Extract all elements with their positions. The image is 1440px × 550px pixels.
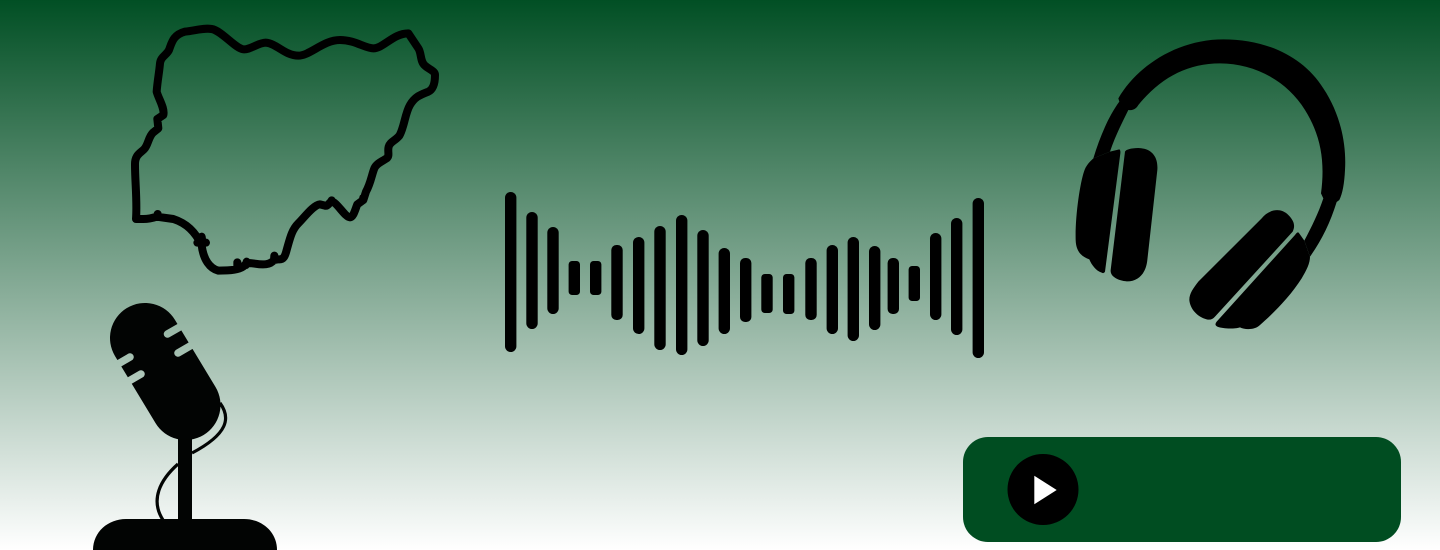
player background [963, 437, 1401, 542]
icon: studio microphone [93, 320, 277, 550]
icon: outline map of Nigeria [135, 29, 435, 271]
microphone grille slots [106, 320, 203, 388]
headband [1093, 39, 1345, 257]
right outer ear cup [1215, 232, 1310, 329]
play triangle [1034, 476, 1057, 504]
left outer ear cup [1076, 149, 1120, 273]
right ear pad [1189, 210, 1294, 320]
microphone cord [157, 403, 226, 520]
sound wave bars [505, 192, 984, 358]
play button circle [1008, 454, 1078, 525]
icon: headphones [1076, 39, 1345, 329]
audio player bar [963, 437, 1401, 542]
left ear pad [1111, 148, 1157, 281]
microphone stem [178, 430, 192, 525]
microphone base [93, 519, 277, 550]
microphone capsule [145, 338, 186, 405]
